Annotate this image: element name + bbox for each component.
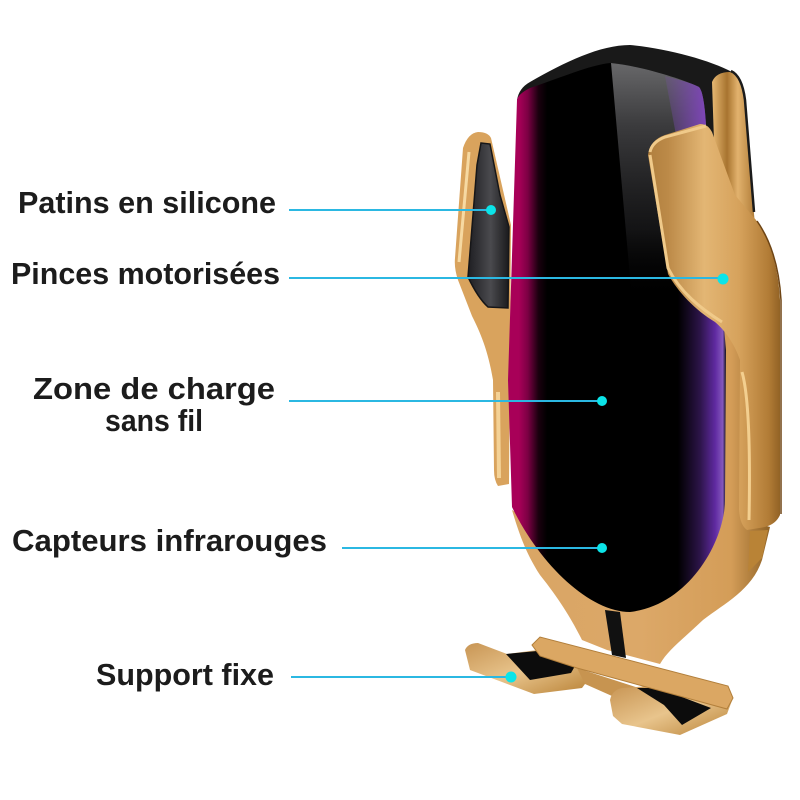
phone plate face [508, 63, 726, 612]
dark fold on cradle [748, 530, 768, 572]
right clamp inner column [742, 372, 749, 520]
callout: support fixe: Support fixe [96, 657, 274, 692]
left clamp lower highlight [498, 392, 499, 478]
silicone pad [468, 143, 509, 308]
base bar [532, 637, 733, 709]
callout: patins en silicone [18, 185, 496, 220]
back clamp dark edge [731, 71, 754, 212]
product: wireless car charger mount [455, 45, 781, 735]
right base [610, 686, 733, 735]
callout: pinces motorisées: Pinces motorisées [11, 256, 280, 291]
leather back top [517, 45, 745, 140]
right clamp [648, 124, 780, 530]
callout: capteurs infrarouges: Capteurs infrarouges [12, 523, 327, 558]
callout: zone de charge sans fil: Zone de charge [33, 371, 275, 406]
callout: capteurs infrarouges [12, 523, 607, 558]
callout: patins en silicone: Patins en silicone [18, 185, 276, 220]
left pad [506, 651, 575, 680]
cradle slit [605, 610, 626, 658]
left clamp highlight [459, 152, 469, 262]
callout: zone de charge sans fil [33, 371, 607, 438]
left roller and base [465, 643, 588, 694]
callout: support fixe [96, 657, 516, 692]
right clamp edge highlight [650, 126, 722, 322]
top face purple [665, 76, 706, 135]
right clamp outer edge [757, 221, 781, 514]
top face sheen [611, 63, 716, 300]
cradle arm [512, 320, 770, 664]
callout: zone de charge sans fil: sans fil [105, 403, 203, 438]
callout: pinces motorisées [11, 256, 728, 291]
back clamp right [712, 72, 755, 240]
left clamp gold frame [455, 132, 511, 486]
right pad [637, 688, 711, 725]
connector [577, 668, 645, 696]
